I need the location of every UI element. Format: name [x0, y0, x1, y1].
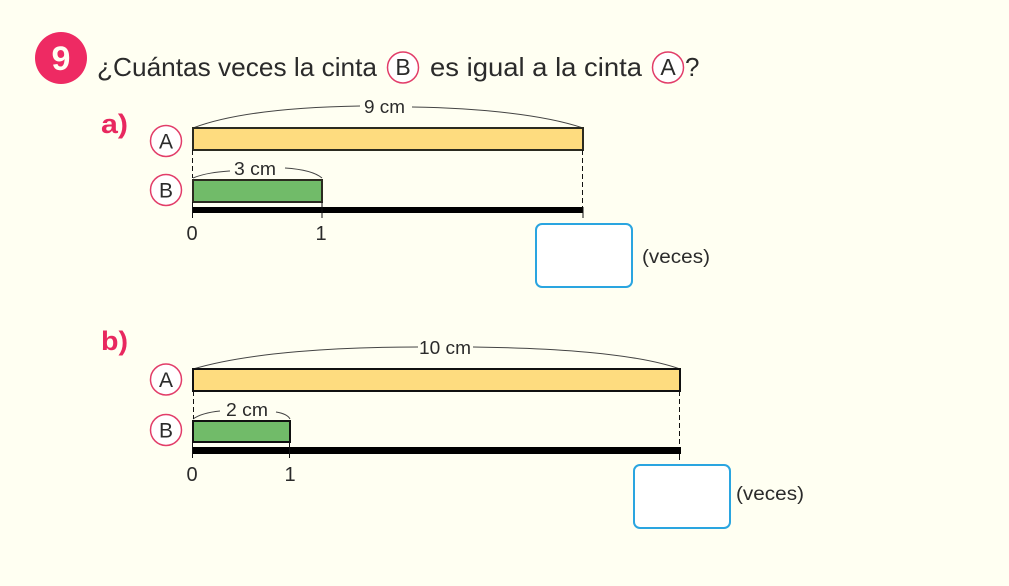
answer box a	[536, 224, 632, 287]
circle label B: B	[159, 180, 173, 202]
part b	[101, 326, 804, 528]
brace: 9 cm: 9 cm	[364, 97, 405, 117]
number line: 0	[186, 464, 198, 486]
title question: B	[395, 54, 411, 80]
number badge 9: 9	[52, 40, 70, 78]
brace: 10 cm	[193, 338, 680, 369]
brace: 2 cm: 2 cm	[226, 400, 268, 420]
number line: 1	[284, 464, 296, 486]
circle label A	[150, 364, 182, 395]
tape A	[193, 128, 583, 150]
answer box b	[634, 465, 730, 528]
title question: es igual a la cinta	[430, 52, 643, 82]
number badge 9	[35, 32, 87, 84]
tape B	[193, 421, 290, 442]
label b): b)	[101, 326, 128, 356]
circle label A: A	[159, 130, 173, 154]
unit: veces b: (veces)	[736, 484, 804, 505]
part a	[101, 97, 710, 287]
brace: 10 cm: 10 cm	[419, 338, 471, 358]
unit: veces a: (veces)	[642, 247, 710, 268]
tape A	[193, 369, 680, 391]
title question	[97, 52, 699, 83]
number line	[186, 150, 584, 245]
brace: 3 cm: 3 cm	[234, 159, 276, 179]
circle label B	[150, 414, 182, 446]
brace: 9 cm	[193, 97, 583, 128]
title question: ?	[685, 52, 699, 82]
label a): a)	[101, 109, 128, 139]
title question: A	[660, 54, 676, 80]
circle label A	[150, 126, 182, 156]
brace: 2 cm	[193, 400, 290, 420]
number line: 1	[315, 223, 327, 245]
number line: 0	[186, 223, 198, 245]
circle label B	[150, 174, 182, 206]
title question: ¿Cuántas veces la cinta	[97, 52, 378, 82]
circle label B: B	[159, 420, 173, 442]
brace: 3 cm	[193, 159, 322, 179]
tape B	[193, 180, 322, 202]
number line	[186, 391, 681, 486]
circle label A: A	[159, 369, 173, 392]
